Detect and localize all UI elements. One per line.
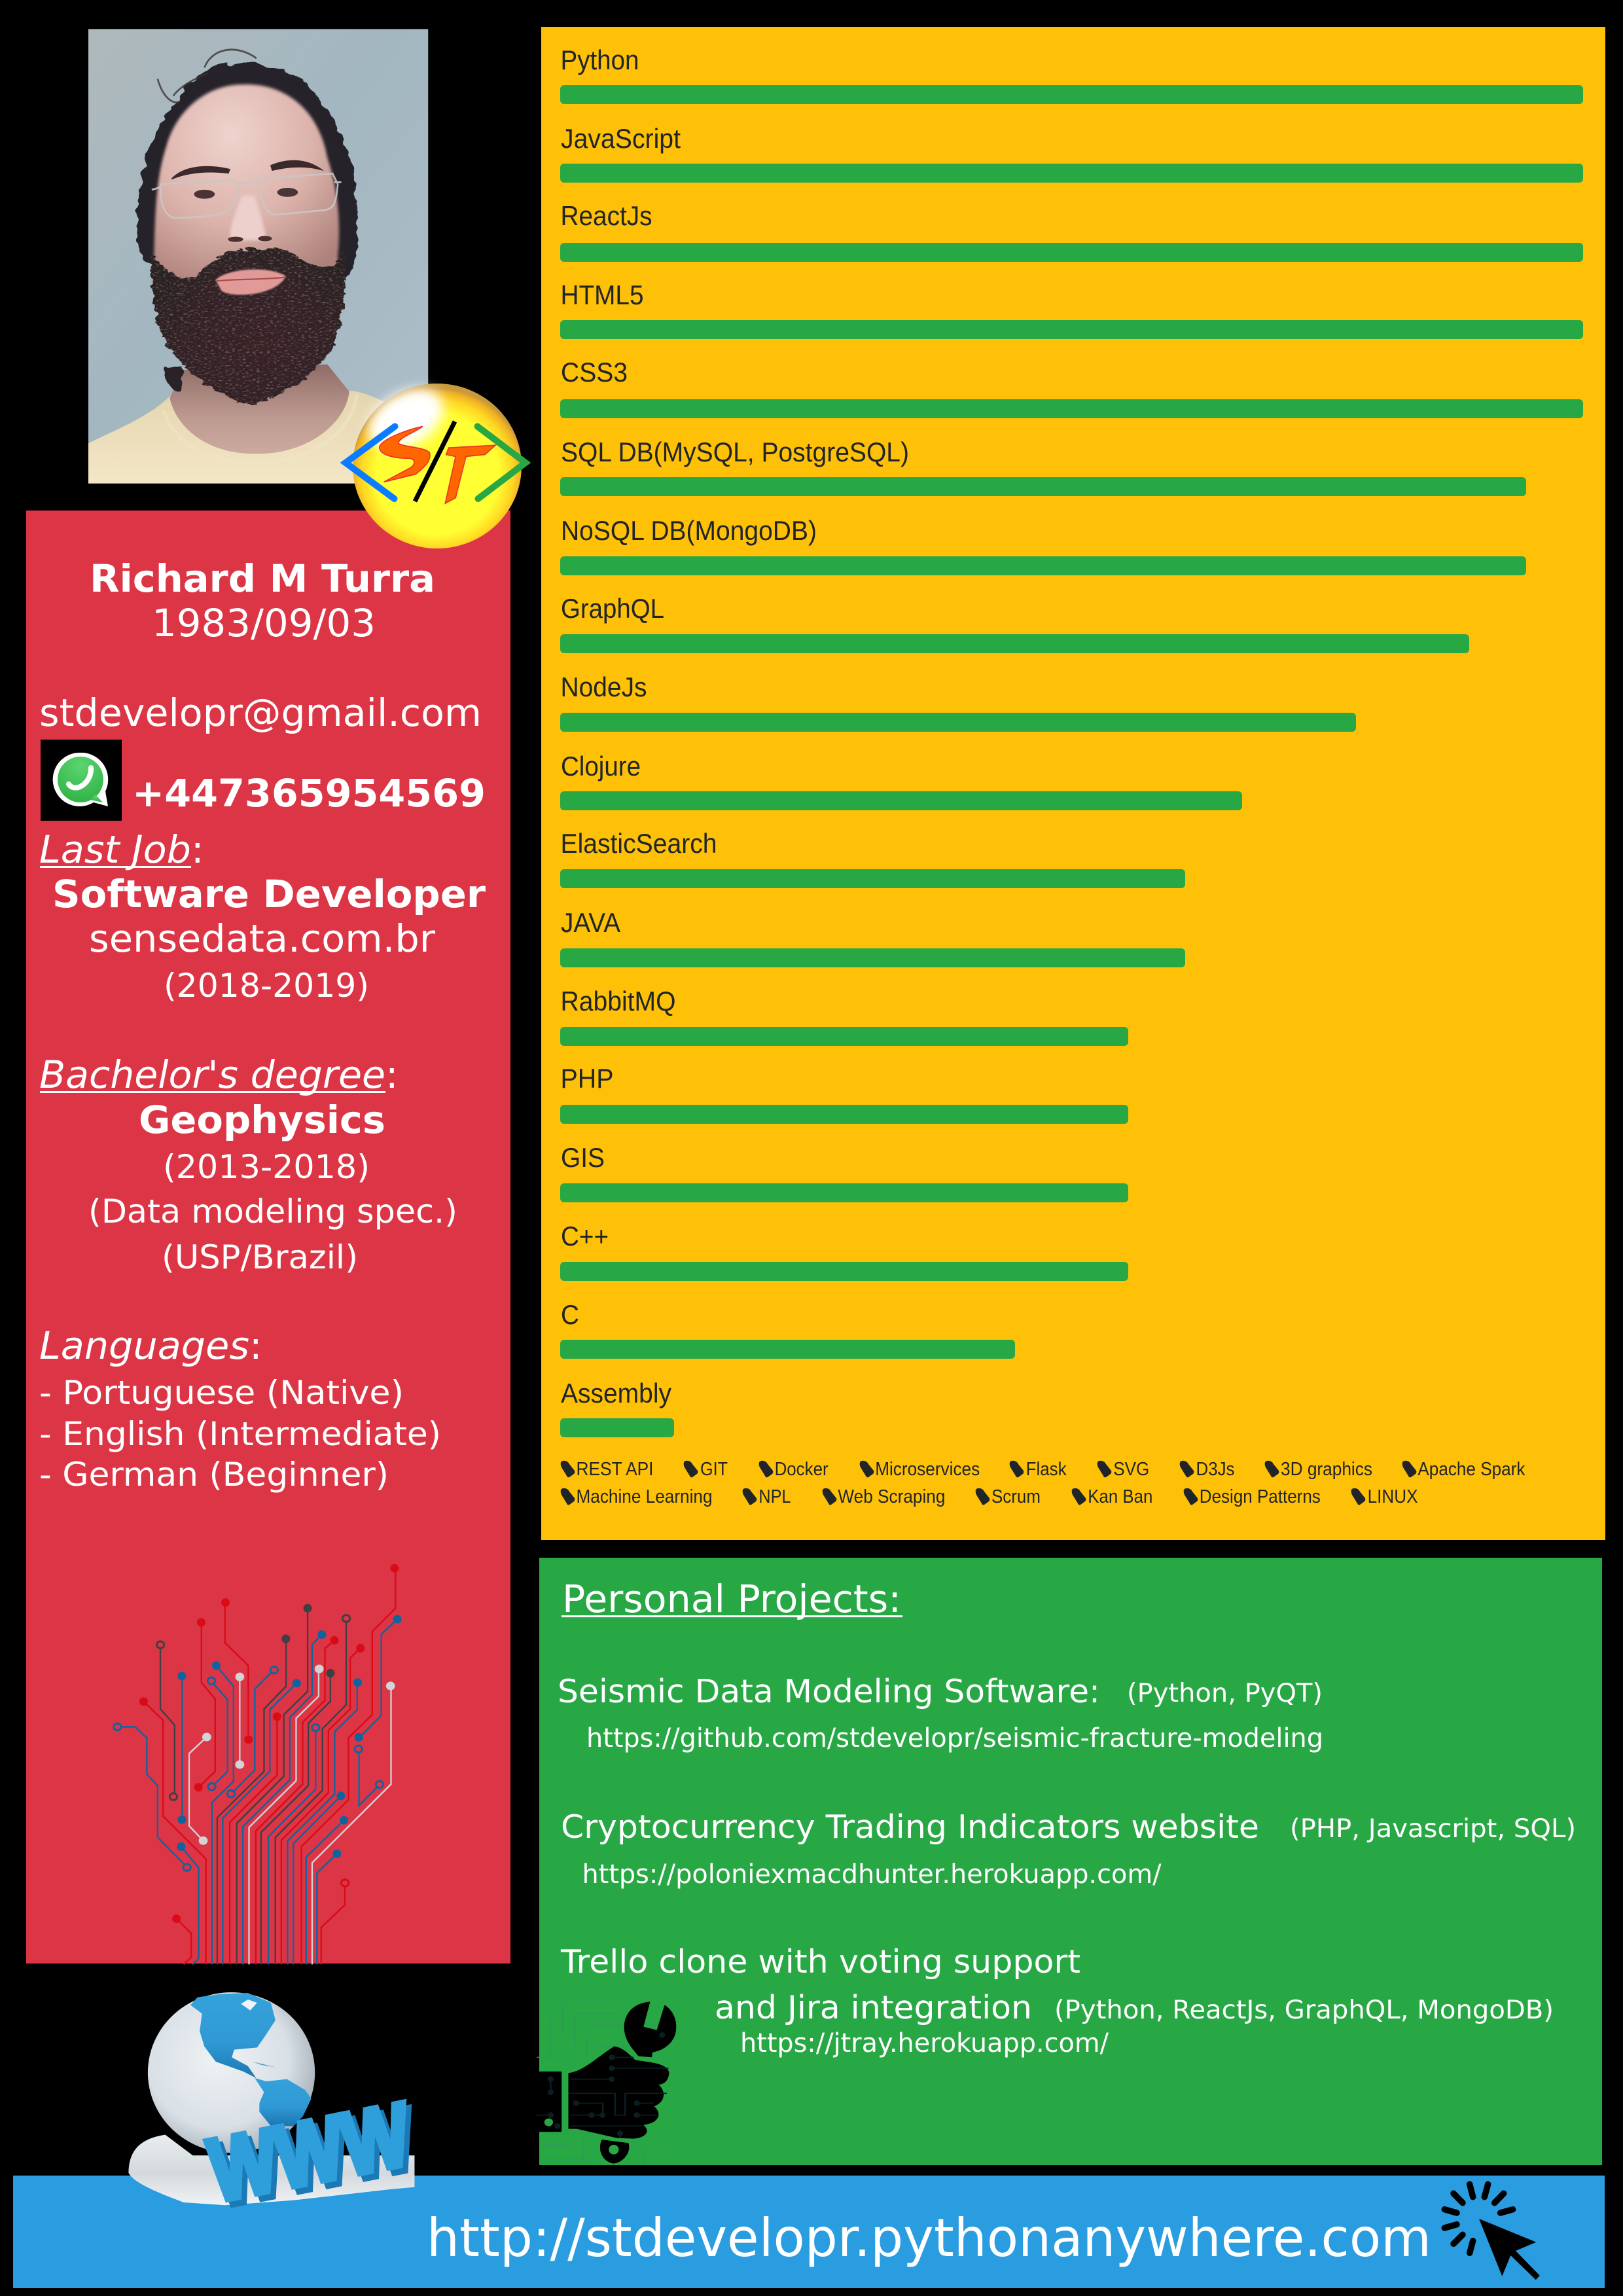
skill: C++ bbox=[560, 1221, 1128, 1281]
panel: contact info bbox=[26, 511, 510, 1964]
tags: row 1: GIT bbox=[700, 1459, 728, 1480]
birth date: 1983/09/03 bbox=[152, 601, 376, 645]
skill: GraphQL: GraphQL bbox=[561, 593, 664, 624]
photo: portrait of Richard bbox=[88, 29, 428, 484]
skill: CSS3 bbox=[560, 357, 1583, 418]
skill: NodeJs: NodeJs bbox=[560, 672, 647, 702]
heading: degree: : bbox=[385, 1052, 399, 1097]
skill: PHP: PHP bbox=[560, 1063, 614, 1094]
tags: row 1: Microservices bbox=[875, 1459, 980, 1480]
skill: GraphQL bbox=[560, 593, 1469, 653]
skill: CSS3: CSS3 bbox=[561, 357, 628, 387]
skill: Clojure bbox=[560, 751, 1242, 810]
skill: C: C bbox=[561, 1299, 579, 1330]
skill: Python bbox=[560, 45, 1583, 104]
tags: row 1: Flask bbox=[1026, 1459, 1067, 1480]
project 2 stack: (PHP, Javascript, SQL) bbox=[1290, 1814, 1576, 1844]
project 1 link: https://github.com/stdevelopr/seismic-fracture-modeling bbox=[586, 1723, 1323, 1753]
email: stdevelopr@gmail.com bbox=[39, 691, 482, 735]
icon: globe with www bbox=[128, 1992, 414, 2205]
tags: row 1: Docker bbox=[775, 1459, 829, 1480]
website url: http://stdevelopr.pythonanywhere.com bbox=[427, 2208, 1431, 2269]
tags: row 1: SVG bbox=[1113, 1459, 1149, 1480]
degree field: Geophysics bbox=[139, 1098, 385, 1142]
project 2 title: Cryptocurrency Trading Indicators website bbox=[561, 1808, 1259, 1846]
university: (USP/Brazil) bbox=[162, 1238, 358, 1276]
logo: S/T badge bbox=[346, 376, 526, 548]
skill: HTML5: HTML5 bbox=[560, 279, 644, 310]
skill: HTML5 bbox=[560, 279, 1583, 339]
heading: languages: : bbox=[249, 1323, 262, 1368]
heading: last job: Last Job bbox=[39, 827, 191, 872]
tags: row 2: LINUX bbox=[1368, 1486, 1418, 1507]
project 2 link: https://poloniexmacdhunter.herokuapp.com/ bbox=[582, 1859, 1162, 1890]
skill: GIS: GIS bbox=[561, 1142, 605, 1173]
skill: Clojure: Clojure bbox=[561, 751, 641, 781]
skill: ReactJs bbox=[560, 200, 1583, 262]
skill: RabbitMQ bbox=[560, 986, 1128, 1046]
panel: skills bbox=[541, 27, 1605, 1540]
tags: row 2: NPL bbox=[758, 1486, 791, 1507]
skill: JavaScript bbox=[560, 123, 1583, 183]
label: www: WWW bbox=[208, 2090, 421, 2226]
skill: SQL DB: SQL DB(MySQL, PostgreSQL) bbox=[561, 437, 909, 467]
skill: NoSQL DB: NoSQL DB(MongoDB) bbox=[561, 515, 817, 546]
tags: row 2: Scrum bbox=[991, 1486, 1041, 1507]
skill: PHP bbox=[560, 1063, 1128, 1124]
language: english: - English (Intermediate) bbox=[39, 1415, 441, 1453]
icon: whatsapp bbox=[41, 740, 122, 821]
panel: personal projects bbox=[539, 1558, 1602, 2165]
degree specialization: (Data modeling spec.) bbox=[88, 1193, 457, 1230]
skill: ElasticSearch: ElasticSearch bbox=[560, 828, 717, 859]
skill: Python: Python bbox=[560, 45, 639, 75]
heading: languages: Languages bbox=[39, 1323, 249, 1368]
label: www: WWW bbox=[203, 2085, 416, 2221]
job years: (2018-2019) bbox=[164, 967, 369, 1005]
project 1 title: Seismic Data Modeling Software: bbox=[558, 1673, 1100, 1710]
skill: C bbox=[560, 1299, 1015, 1359]
language: german: - German (Beginner) bbox=[39, 1456, 389, 1494]
project 3 stack: (Python, ReactJs, GraphQL, MongoDB) bbox=[1054, 1996, 1554, 2025]
icon: hand holding wrench bbox=[537, 2001, 677, 2164]
skill: GIS bbox=[560, 1142, 1128, 1202]
skill: JAVA: JAVA bbox=[561, 907, 620, 938]
project 3 link: https://jtray.herokuapp.com/ bbox=[740, 2028, 1109, 2058]
heading: degree: Bachelor's degree bbox=[39, 1052, 385, 1097]
phone number: +447365954569 bbox=[132, 771, 486, 816]
skill: JAVA bbox=[560, 907, 1185, 967]
skill: ReactJs: ReactJs bbox=[560, 200, 652, 231]
heading: last job: : bbox=[191, 827, 204, 872]
icon: click cursor bbox=[1444, 2184, 1540, 2280]
heading: personal projects: Personal Projects: bbox=[562, 1577, 901, 1621]
degree years: (2013-2018) bbox=[163, 1148, 370, 1186]
project 3 title line 2: and Jira integration bbox=[715, 1989, 1032, 2026]
tags: row 2: Web Scraping bbox=[838, 1486, 945, 1507]
project 1 stack: (Python, PyQT) bbox=[1127, 1679, 1323, 1708]
tags: row 2: Machine Learning bbox=[576, 1486, 712, 1507]
skill: NoSQL DB bbox=[560, 515, 1526, 575]
skill: Assembly bbox=[560, 1378, 674, 1437]
tags: row 2: Design Patterns bbox=[1200, 1486, 1321, 1507]
company: sensedata.com.br bbox=[89, 916, 435, 961]
tags: row 1: Apache Spark bbox=[1418, 1459, 1525, 1480]
tags: row 2 bbox=[561, 1486, 1418, 1507]
skill: C++: C++ bbox=[561, 1221, 609, 1251]
tags: row 1: 3D graphics bbox=[1281, 1459, 1372, 1480]
skill: RabbitMQ: RabbitMQ bbox=[560, 986, 675, 1016]
skill: Assembly: Assembly bbox=[561, 1378, 671, 1408]
language: portuguese: - Portuguese (Native) bbox=[39, 1374, 404, 1412]
footer bar bbox=[13, 2176, 1605, 2288]
skill: JavaScript: JavaScript bbox=[561, 123, 681, 154]
job title: Software Developer bbox=[52, 872, 486, 916]
tags: row 1 bbox=[561, 1459, 1525, 1480]
project 3 title line 1: Trello clone with voting support bbox=[560, 1943, 1080, 1981]
name: Richard M Turra bbox=[90, 556, 435, 601]
skill: ElasticSearch bbox=[560, 828, 1185, 888]
skill: NodeJs bbox=[560, 672, 1356, 732]
decoration: circuit tree bbox=[113, 1564, 402, 1964]
tags: row 1: REST API bbox=[576, 1459, 653, 1480]
tags: row 2: Kan Ban bbox=[1088, 1486, 1152, 1507]
skill: SQL DB bbox=[560, 437, 1526, 496]
tags: row 1: D3Js bbox=[1196, 1459, 1234, 1480]
